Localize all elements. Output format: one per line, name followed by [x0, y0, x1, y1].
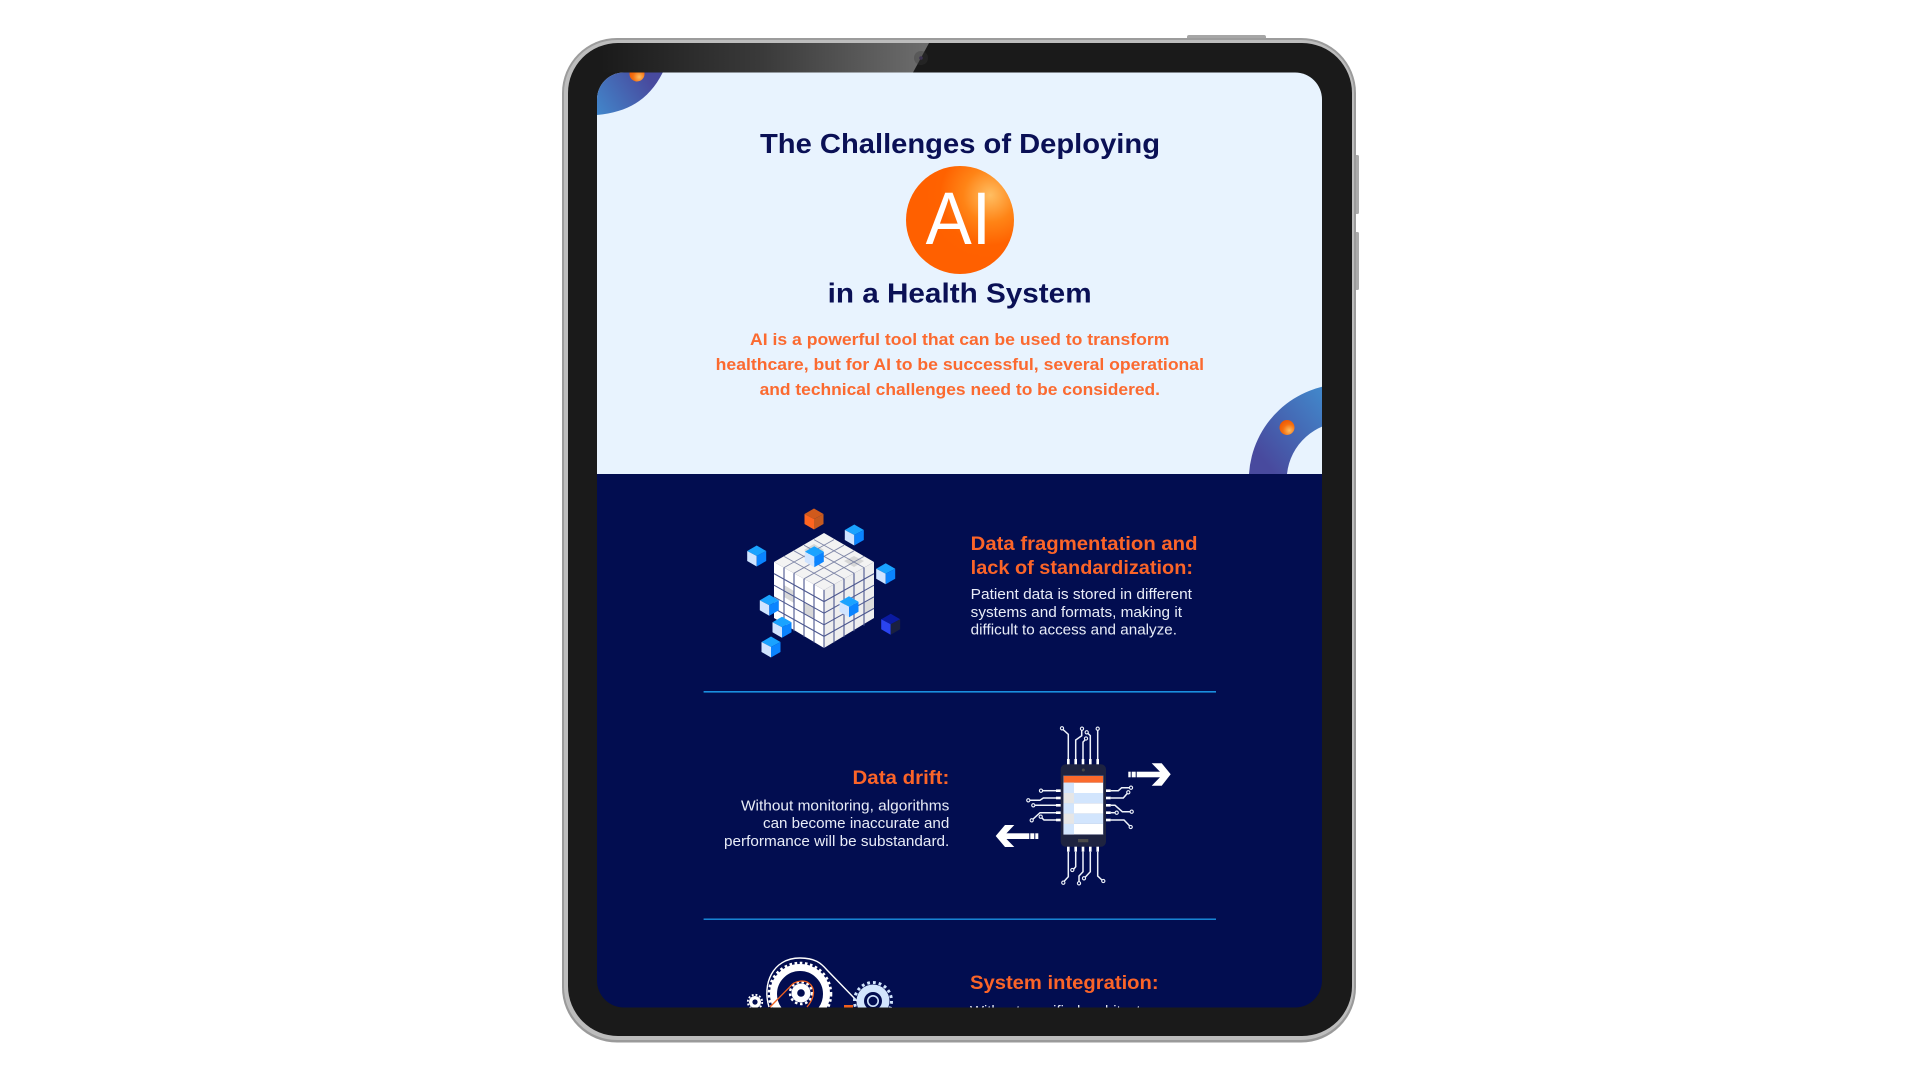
title line two: in a Health System: [828, 278, 1092, 309]
text: data drift: [724, 799, 949, 850]
volume up button: [1354, 155, 1359, 214]
icon: gears: [746, 957, 893, 1008]
icon: data cube: [747, 508, 900, 658]
screen: [597, 66, 1345, 1025]
intro paragraph: and technical challenges need to be considered.: [760, 381, 1160, 399]
intro paragraph: healthcare, but for AI to be successful, several operational: [716, 356, 1204, 374]
front camera: [914, 51, 928, 65]
tablet device frame: [562, 35, 1359, 1042]
intro paragraph: AI is a powerful tool that can be used to transform: [750, 331, 1169, 349]
arrow: right: [1128, 763, 1171, 786]
bezel reflection: [643, 43, 929, 72]
text: data fragmentation: systems and formats, making it: [971, 605, 1182, 621]
text: data drift: Without monitoring, algorithms: [741, 799, 949, 815]
heading: data fragmentation: [972, 536, 1196, 574]
text: data drift: performance will be substandard.: [724, 834, 949, 850]
text: data drift: can become inaccurate and: [763, 816, 949, 832]
corner dot right: [1280, 420, 1294, 435]
black bezel: [568, 43, 1352, 1036]
text: system integration (clipped): Without a unified architecture,: [970, 1004, 1166, 1020]
divider one: [704, 691, 1216, 693]
text: data fragmentation: [971, 587, 1192, 639]
silver edge: [562, 38, 1356, 1042]
heading: data fragmentation: Data fragmentation and: [971, 534, 1198, 555]
AI badge: [906, 166, 1014, 274]
heading: data drift: Data drift:: [852, 768, 949, 789]
title line one: The Challenges of Deploying: [760, 128, 1160, 159]
corner arc top-left: [597, 72, 663, 115]
divider two: [704, 918, 1216, 920]
text: data fragmentation: Patient data is stored in different: [971, 587, 1192, 603]
icon: phone with circuits: [1027, 727, 1133, 885]
text: data fragmentation: difficult to access and analyze.: [971, 623, 1177, 639]
panel: light header: [597, 72, 1322, 474]
heading: system integration: System integration:: [970, 973, 1159, 994]
intro paragraph: [716, 331, 1204, 399]
arrow: left: [996, 825, 1038, 847]
top power button: [1187, 35, 1266, 41]
volume down button: [1354, 232, 1359, 290]
panel: navy content: [597, 474, 1322, 1014]
corner dot top-left: [630, 72, 644, 82]
AI badge: AI: [926, 177, 991, 260]
heading: data fragmentation: lack of standardization:: [971, 558, 1193, 579]
corner ring bottom-right: [1249, 386, 1322, 474]
